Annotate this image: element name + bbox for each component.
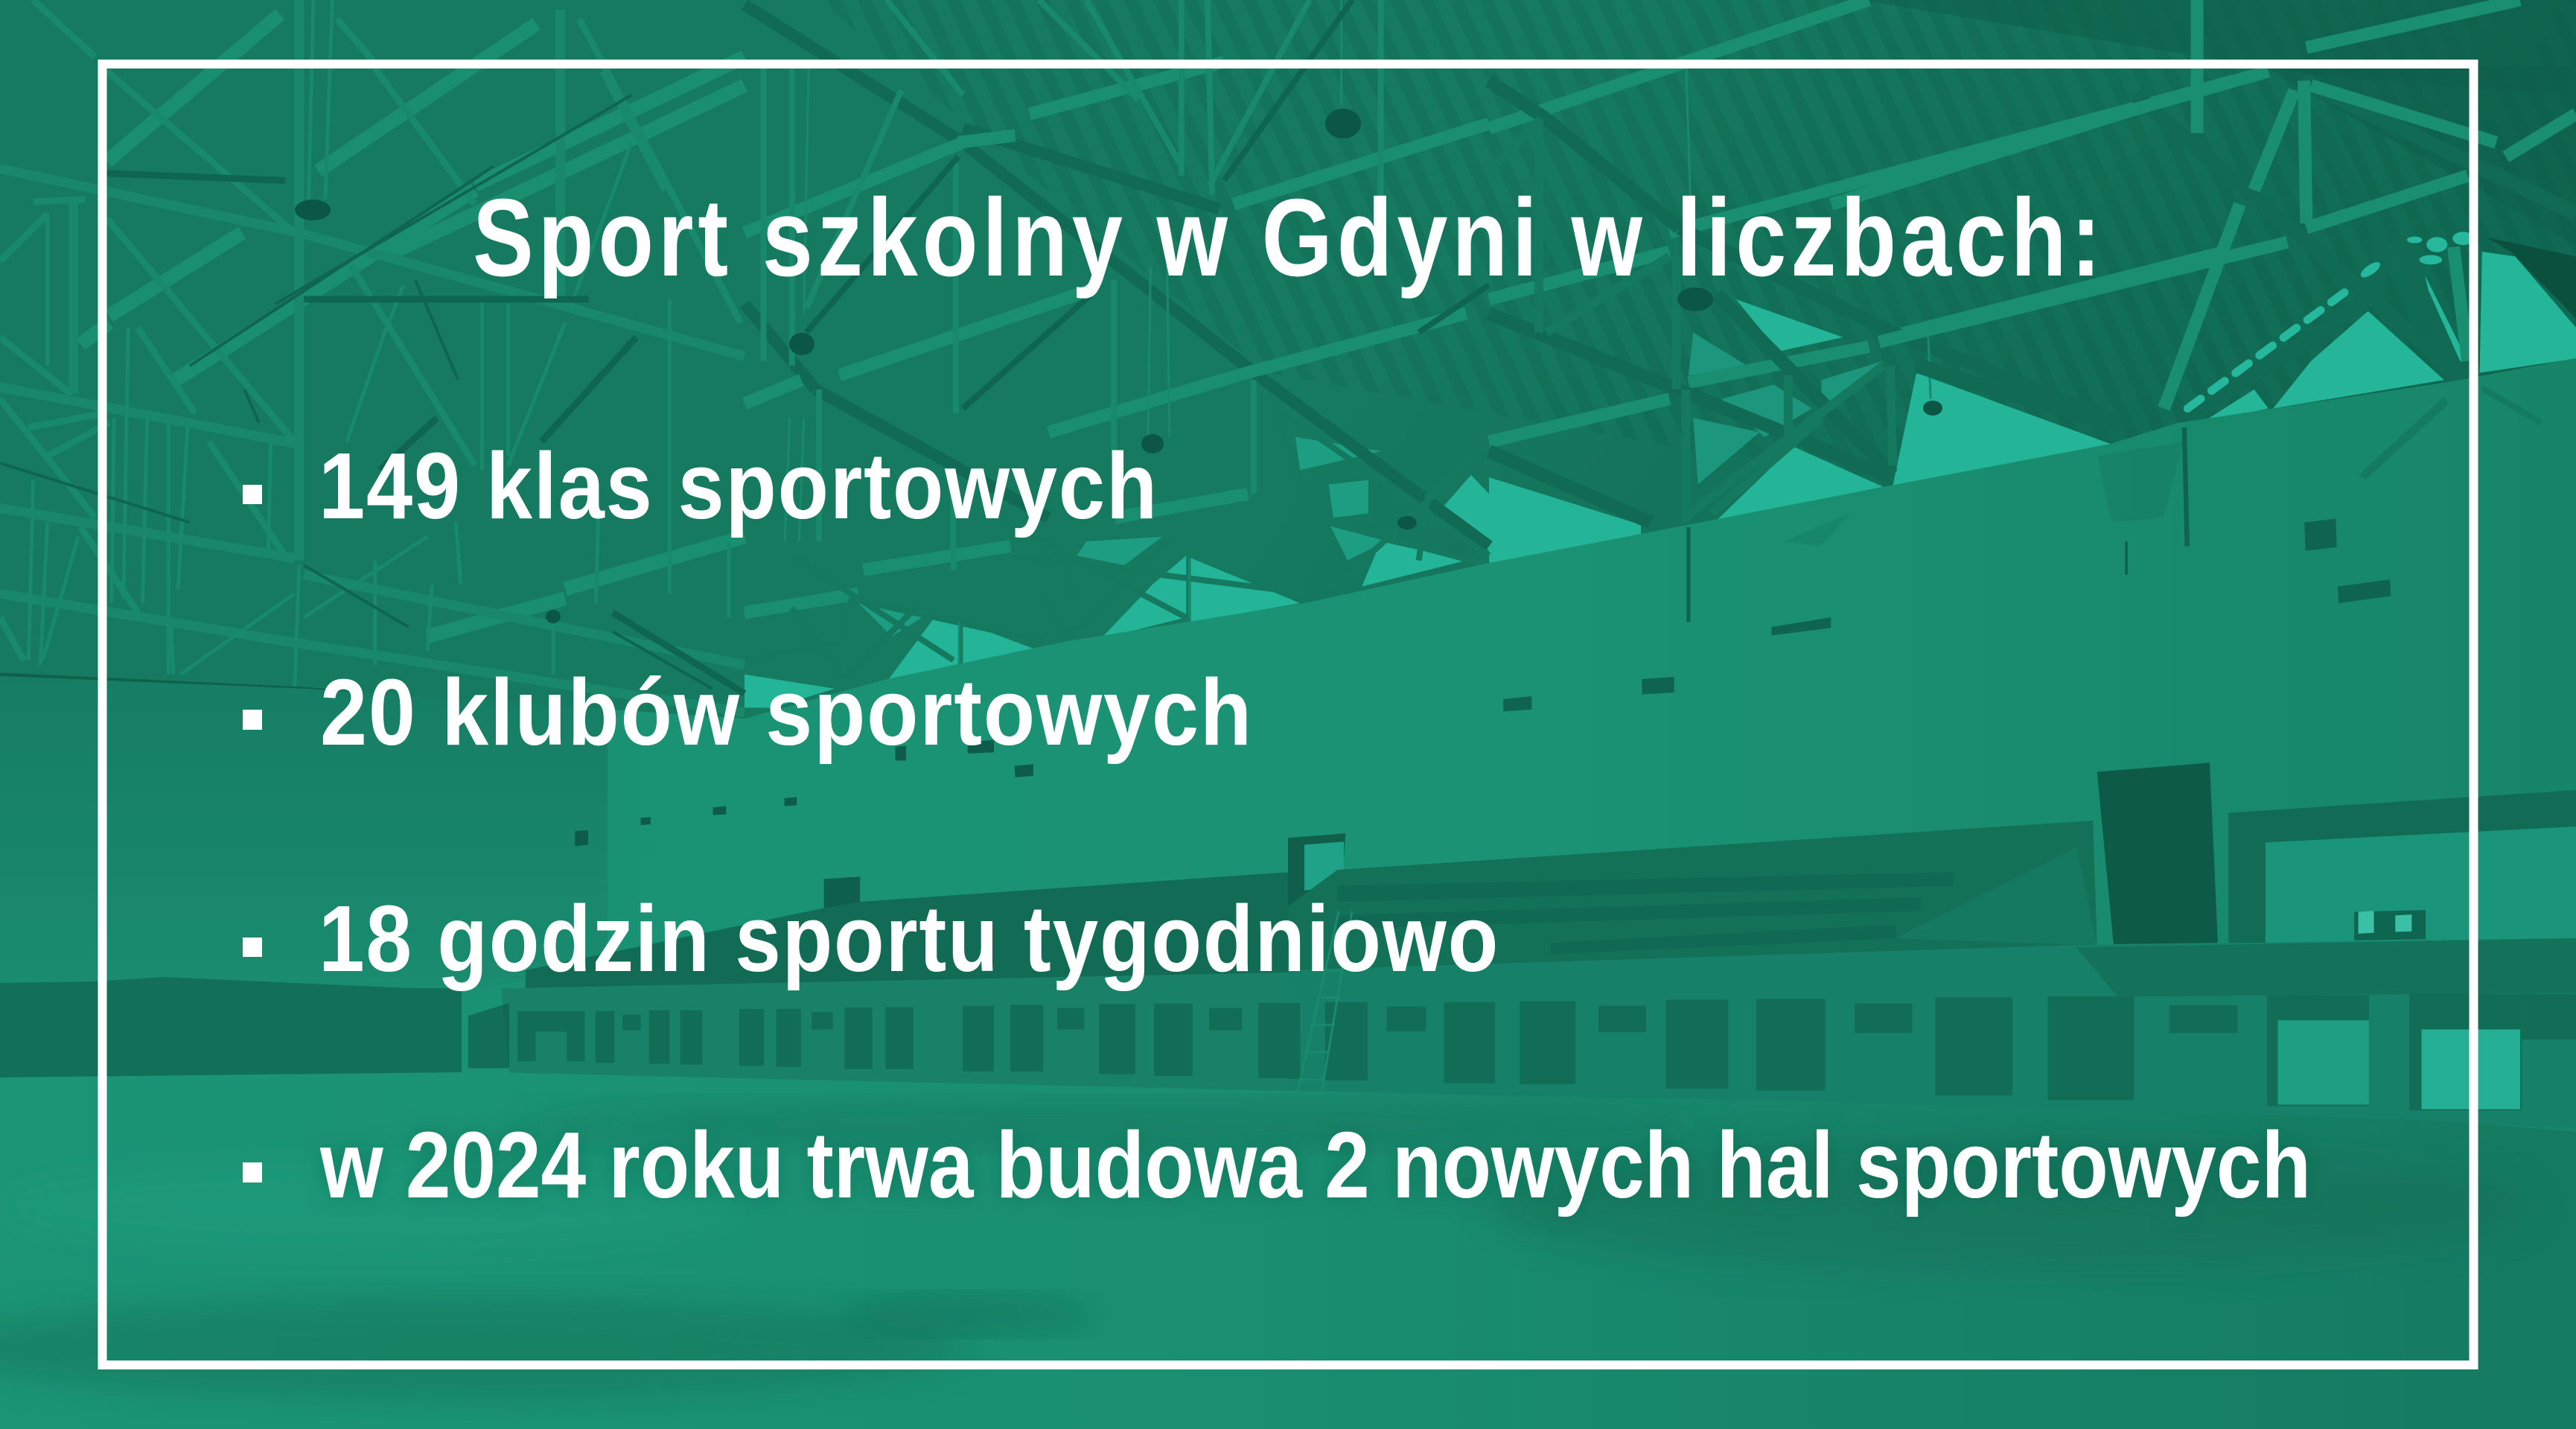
grandstand and doorway xyxy=(526,763,2576,988)
list item: 149 klas sportowych: 149 klas sportowych xyxy=(319,433,1158,538)
low building with glass-block windows xyxy=(468,911,2576,1127)
hall floor xyxy=(0,1072,2576,1429)
hall walls xyxy=(0,358,2576,1139)
ceiling xyxy=(0,0,2576,745)
list item: 18 godzin sportu tygodniowo: 18 godzin sportu tygodniowo xyxy=(319,886,1499,991)
list item: 20 klubów sportowych: 20 klubów sportowych xyxy=(320,660,1253,765)
hanging lamps xyxy=(295,109,1942,623)
title: Sport szkolny w Gdyni w liczbach: xyxy=(473,176,2105,299)
list item: w 2024 roku trwa budowa 2 nowych hal sportowych: w 2024 roku trwa budowa 2 nowych hal sportowych xyxy=(319,1113,2311,1218)
roof trusses xyxy=(0,0,2576,733)
skylights xyxy=(745,252,2576,707)
